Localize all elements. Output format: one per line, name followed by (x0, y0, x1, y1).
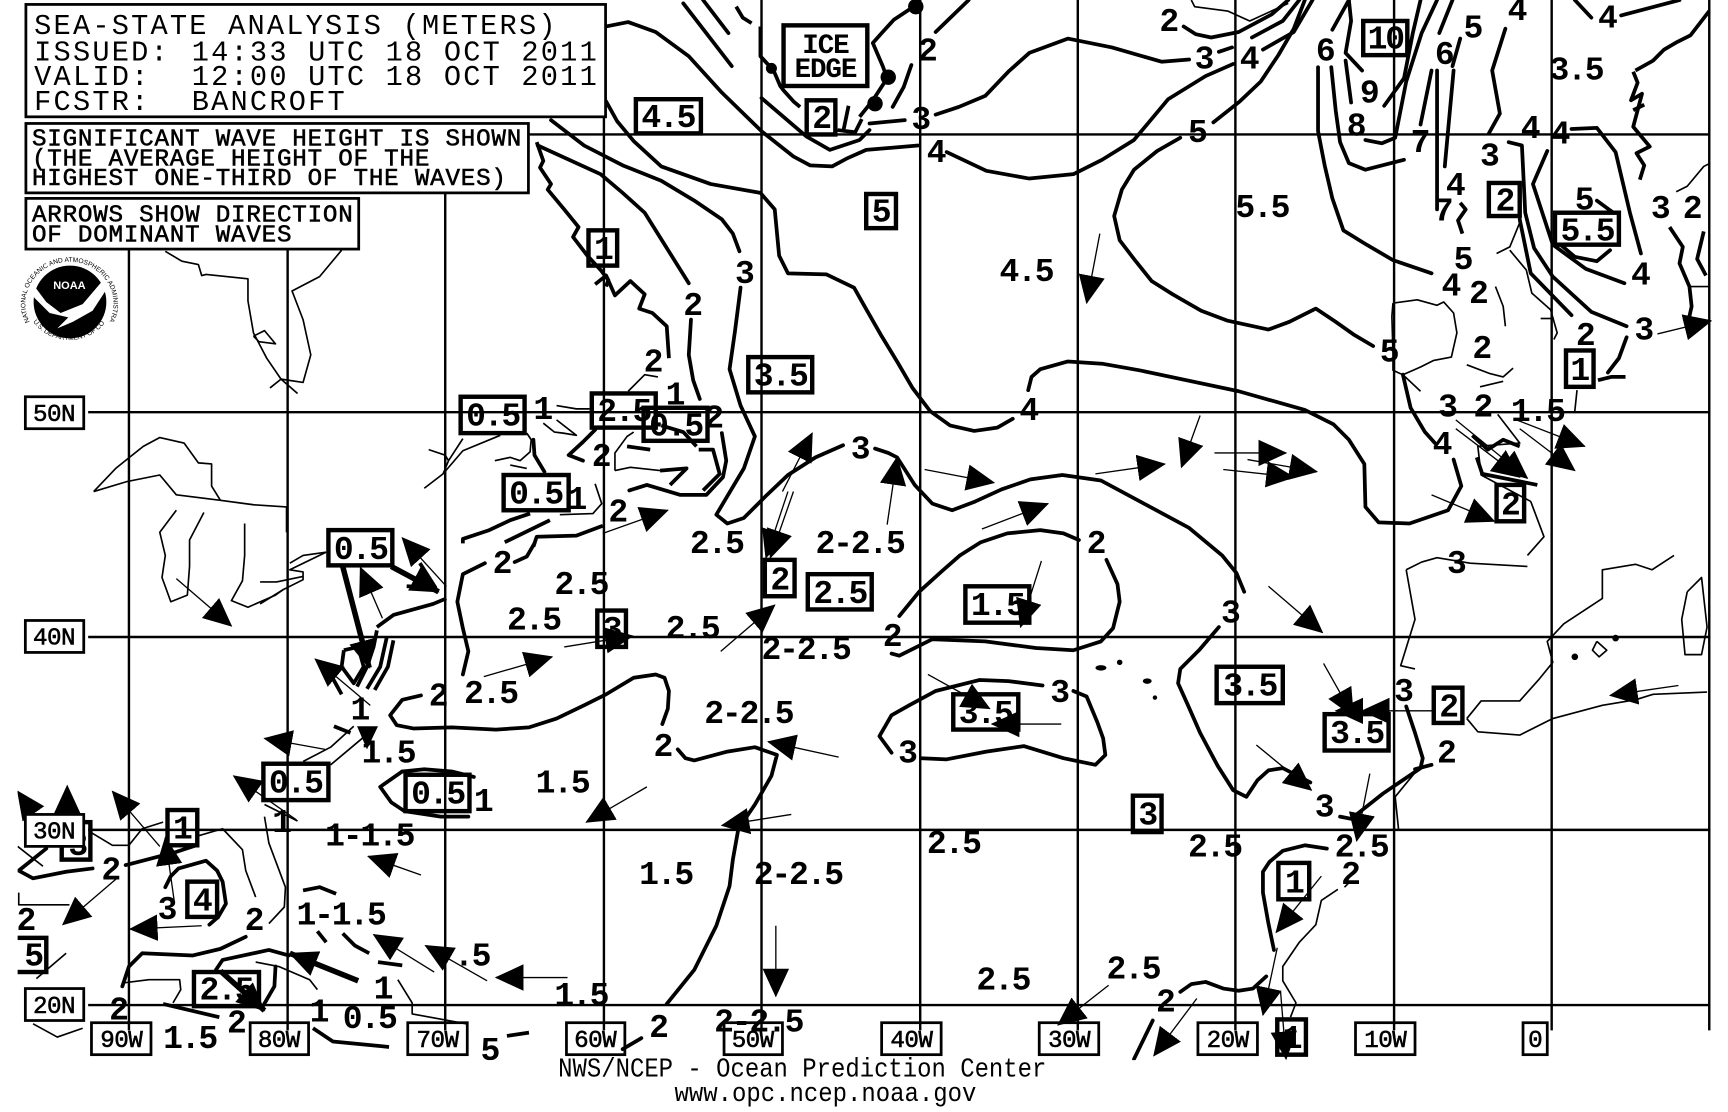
wave height labels: 2-2.5 (816, 525, 905, 563)
wave height labels: 2 (1437, 735, 1455, 773)
box: 5.5: 5.5 (1560, 212, 1615, 250)
wave height labels: 2.5 (666, 610, 720, 648)
20W: 20W (1207, 1028, 1250, 1055)
wave height labels: 3 (1394, 673, 1413, 711)
box: 3.5: 3.5 (959, 695, 1013, 733)
wave height labels: 4.5 (1000, 253, 1054, 291)
icon: NOAA logo (20, 257, 118, 340)
thick chevron arrow near New York (407, 563, 435, 587)
note: arrows (26, 198, 359, 249)
box: 1 (1277, 1019, 1306, 1058)
box: 5 at map edge: 5 (24, 937, 43, 975)
wave height labels: 3 (851, 430, 870, 468)
box: 2 (1434, 688, 1462, 726)
wave height labels: 2-2.5 (714, 1004, 804, 1042)
30W: 30W (1048, 1028, 1091, 1055)
wave height labels: 3 (1634, 311, 1653, 349)
box: 1: 1 (1570, 352, 1589, 390)
box: 3 partly hidden (62, 822, 90, 865)
wave height labels: 9 (1360, 75, 1378, 113)
box: 2 (765, 560, 795, 600)
wave height labels: 2-2.5 (704, 695, 794, 733)
wave height labels: 1 (272, 804, 291, 842)
latitude label: 30N (25, 814, 84, 847)
wave height labels: 4 (1240, 40, 1259, 78)
30W (1039, 1023, 1099, 1055)
80W: 80W (258, 1028, 301, 1055)
20W (1198, 1023, 1257, 1055)
latitude label: 30N: 30N (33, 820, 75, 847)
wave height labels: 5 (1380, 333, 1399, 371)
box: 3.5: 3.5 (754, 358, 808, 396)
wave height labels: 8 (1347, 108, 1366, 146)
title block (26, 4, 606, 119)
wave height labels: 2.5 (507, 601, 561, 639)
title block: SEA-STATE ANALYSIS (METERS) (34, 10, 558, 43)
title block: 12:00 UTC 18 OCT 2011 (192, 61, 599, 94)
50W (724, 1023, 782, 1055)
50W: 50W (732, 1028, 775, 1055)
box: 0.5: 0.5 (411, 775, 465, 813)
box: 4: 4 (193, 882, 212, 920)
box: 0.5: 0.5 (466, 397, 520, 435)
wave height labels: 3 (158, 891, 177, 929)
wave height labels: 5 (1464, 9, 1483, 47)
wave height labels: 1.5 (536, 764, 590, 802)
wave height labels: 4 (1521, 110, 1540, 148)
wave height labels: 2 (883, 618, 901, 656)
80W (250, 1023, 309, 1055)
box: 2: 2 (1501, 487, 1519, 525)
wave height labels: 2 (1159, 3, 1177, 41)
wave height labels: 2 (17, 902, 35, 940)
wave height labels: 3 (1651, 190, 1670, 228)
box: 5 (866, 194, 896, 232)
wave height labels: 2.5 (1335, 828, 1389, 866)
note: significant wave height: (THE AVERAGE HEIGHT OF THE (32, 146, 430, 173)
wave height labels: 1 (533, 391, 552, 429)
wave height labels: 1.5 (361, 735, 416, 773)
title block: VALID: (34, 61, 151, 94)
wave height labels: 2 (101, 851, 119, 889)
wave height labels: 4 (1446, 167, 1465, 205)
box: 2: 2 (812, 100, 830, 138)
box: 10: 10 (1368, 21, 1403, 59)
wave height labels: 3 (1480, 137, 1499, 175)
wave height labels: 1-1.5 (325, 817, 415, 855)
island dots (766, 0, 1619, 700)
wave height labels: 2.5 (1188, 828, 1242, 866)
wave height labels: 1.5 (639, 856, 693, 894)
wave height labels: 2.5 (464, 675, 518, 713)
wave height labels: 2-2.5 (754, 856, 843, 894)
wave height labels: 4 (1441, 267, 1460, 305)
box: 1: 1 (173, 811, 192, 849)
box: 2.5: 2.5 (199, 972, 254, 1010)
latitude label: 50N (25, 397, 84, 429)
wave height labels: 1 (310, 994, 329, 1032)
title block: BANCROFT (192, 86, 347, 119)
title block: FCSTR: (34, 86, 151, 119)
wave height labels: 2.5 (927, 825, 981, 863)
wave height labels: 4 (1019, 392, 1038, 430)
wave height labels: 2.5 (1106, 951, 1161, 989)
wave height labels: 3 (1438, 389, 1457, 427)
10W (1356, 1023, 1415, 1055)
60W (566, 1023, 625, 1055)
wave height labels: 0.5 (343, 1000, 397, 1038)
box: 0.5: 0.5 (649, 407, 703, 445)
box: 2.5: 2.5 (813, 575, 868, 613)
note: significant wave height: SIGNIFICANT WAVE HEIGHT IS SHOWN (32, 126, 522, 153)
wave height labels: 2 (1156, 984, 1174, 1022)
box: 2.5: 2.5 (597, 393, 652, 431)
box: 2: 2 (1495, 183, 1513, 221)
wave height labels: 1 (568, 481, 587, 519)
wave height labels: 5 (1454, 241, 1473, 279)
wave height labels: 2 (1469, 275, 1487, 313)
wave height labels: 3 (1195, 40, 1214, 78)
wave height labels: 5.5 (1235, 189, 1290, 227)
wave height labels: 1.5 (554, 977, 609, 1015)
wave height labels: 2 (1341, 856, 1359, 894)
wave height labels: 2-2.5 (762, 631, 851, 669)
wave height labels: 4 (927, 134, 946, 172)
70W (408, 1023, 467, 1055)
90W (91, 1023, 151, 1055)
wave height labels: 1 (350, 692, 369, 730)
wave height labels: 2 (608, 493, 626, 531)
box: 5: 5 (872, 194, 891, 232)
note: arrows: OF DOMINANT WAVES (32, 222, 292, 249)
wave height labels: 1 (374, 970, 393, 1008)
wave height labels: 1.5 (163, 1020, 217, 1058)
box: 1 (1278, 863, 1309, 903)
40W: 40W (890, 1028, 933, 1055)
wave height labels: 2 (649, 1009, 667, 1047)
note: significant wave height (26, 123, 528, 193)
box: 3: 3 (603, 611, 622, 649)
title block: ISSUED: (34, 37, 170, 70)
box: 2: 2 (1439, 688, 1457, 726)
wave height labels: 2 (704, 400, 722, 438)
70W: 70W (417, 1028, 460, 1055)
box: 3: 3 (1138, 796, 1157, 834)
wave height labels: 2 (644, 343, 662, 381)
wave height labels: 2 (1576, 317, 1594, 355)
box: 4.5: 4.5 (641, 99, 696, 137)
wave height labels: 2 (429, 677, 447, 715)
wave height labels: 4 (1433, 426, 1452, 464)
box: 1: 1 (1285, 865, 1304, 903)
40W (882, 1023, 941, 1055)
footer credit: www.opc.ncep.noaa.gov (674, 1079, 976, 1109)
box: 3 partly hidden: 3 (68, 827, 87, 865)
wave height labels: 1 (474, 783, 493, 821)
note: significant wave height: HIGHEST ONE-THIRD OF THE WAVES) (32, 166, 507, 193)
wave height labels: 2 (654, 728, 672, 766)
wave height labels: .5 (454, 937, 491, 975)
wave height labels: 5 (480, 1032, 499, 1070)
plain tails without heads (18, 736, 365, 979)
box: 3 (1133, 796, 1162, 834)
footer credit (558, 1055, 1046, 1109)
wave height labels: 2.5 (554, 566, 609, 604)
box: 0.5: 0.5 (269, 764, 323, 802)
wave height labels: 2 (592, 438, 610, 476)
wave height labels: 3 (735, 255, 754, 293)
wave height labels: 4 (1598, 0, 1617, 38)
latitude label: 40N: 40N (33, 626, 75, 653)
wave height labels: 3 (898, 735, 917, 773)
box: 1: 1 (594, 231, 613, 269)
wave height labels: 2 (227, 1005, 245, 1043)
box: ice edge: ICE (802, 31, 849, 62)
90W: 90W (100, 1028, 143, 1055)
60W: 60W (574, 1028, 617, 1055)
wave height labels: 3 (911, 101, 930, 139)
wave height labels: 5 (1575, 181, 1594, 219)
0 (1523, 1023, 1547, 1055)
wave height labels: 2 (245, 902, 263, 940)
wave height labels: 2 (109, 991, 127, 1029)
box: 0.5: 0.5 (334, 531, 388, 569)
box: 3.5: 3.5 (1330, 715, 1384, 753)
wave height labels: 2 (1683, 190, 1701, 228)
box: 1.5: 1.5 (971, 587, 1025, 625)
wave height labels: 1-1.5 (296, 897, 386, 935)
box: ice edge (784, 25, 867, 86)
footer credit: NWS/NCEP - Ocean Prediction Center (558, 1055, 1046, 1085)
wave height labels: 3 (1221, 595, 1240, 633)
wave height labels: 7 (1411, 124, 1429, 162)
latitude label: 40N (25, 620, 84, 653)
box: 5 at map edge (11, 937, 46, 975)
box: 2 (807, 100, 835, 138)
longitude labels (91, 1023, 1547, 1055)
wave height labels: 3 (1447, 545, 1466, 583)
title block: 14:33 UTC 18 OCT 2011 (192, 37, 599, 70)
wave height labels: 5 (1188, 114, 1207, 152)
wave height labels: 3 (1315, 789, 1334, 827)
10W: 10W (1364, 1028, 1407, 1055)
wave height labels: 3 (1050, 674, 1069, 712)
0: 0 (1528, 1028, 1542, 1055)
latitude label: 50N: 50N (33, 402, 75, 429)
box: 3.5: 3.5 (1223, 667, 1278, 705)
icon: NOAA logo: NOAA (53, 280, 86, 292)
box: 2 (1489, 183, 1520, 221)
wave height labels: 2 (683, 287, 701, 325)
box: 4 (187, 882, 217, 920)
wave height labels: 2.5 (976, 962, 1031, 1000)
wave height labels: 3.5 (1549, 51, 1604, 89)
box: 2: 2 (770, 562, 788, 600)
wave height labels: 1.5 (1511, 393, 1565, 431)
latitude label: 20N (25, 989, 84, 1021)
latitude label: 20N: 20N (33, 994, 75, 1021)
wave height labels: 6 (1435, 36, 1453, 74)
box: 3 (597, 611, 626, 649)
wave height labels: 2 (493, 545, 511, 583)
box: 1 (168, 810, 197, 849)
wave height labels: 2.5 (690, 525, 744, 563)
wave height labels: 2 (918, 33, 936, 71)
box: 1: 1 (1283, 1020, 1302, 1058)
wave height labels: 2 (1473, 389, 1491, 427)
wave height labels: 2 (1472, 330, 1490, 368)
wave height labels: 7 (1434, 192, 1452, 230)
box: 1 (588, 230, 617, 269)
note: arrows: ARROWS SHOW DIRECTION (32, 203, 354, 230)
box: ice edge: EDGE (795, 55, 857, 86)
wave height labels: 4 (1551, 115, 1570, 153)
wave height labels: 1 (666, 376, 685, 414)
box: 0.5: 0.5 (509, 476, 563, 514)
box: 2 (1497, 485, 1524, 525)
box: 1 (1566, 350, 1594, 390)
wave height labels: 2 (1087, 525, 1105, 563)
wave height labels: 4 (1631, 256, 1650, 294)
wave height labels: 6 (1316, 33, 1334, 71)
wave direction arrows (18, 234, 1711, 1059)
